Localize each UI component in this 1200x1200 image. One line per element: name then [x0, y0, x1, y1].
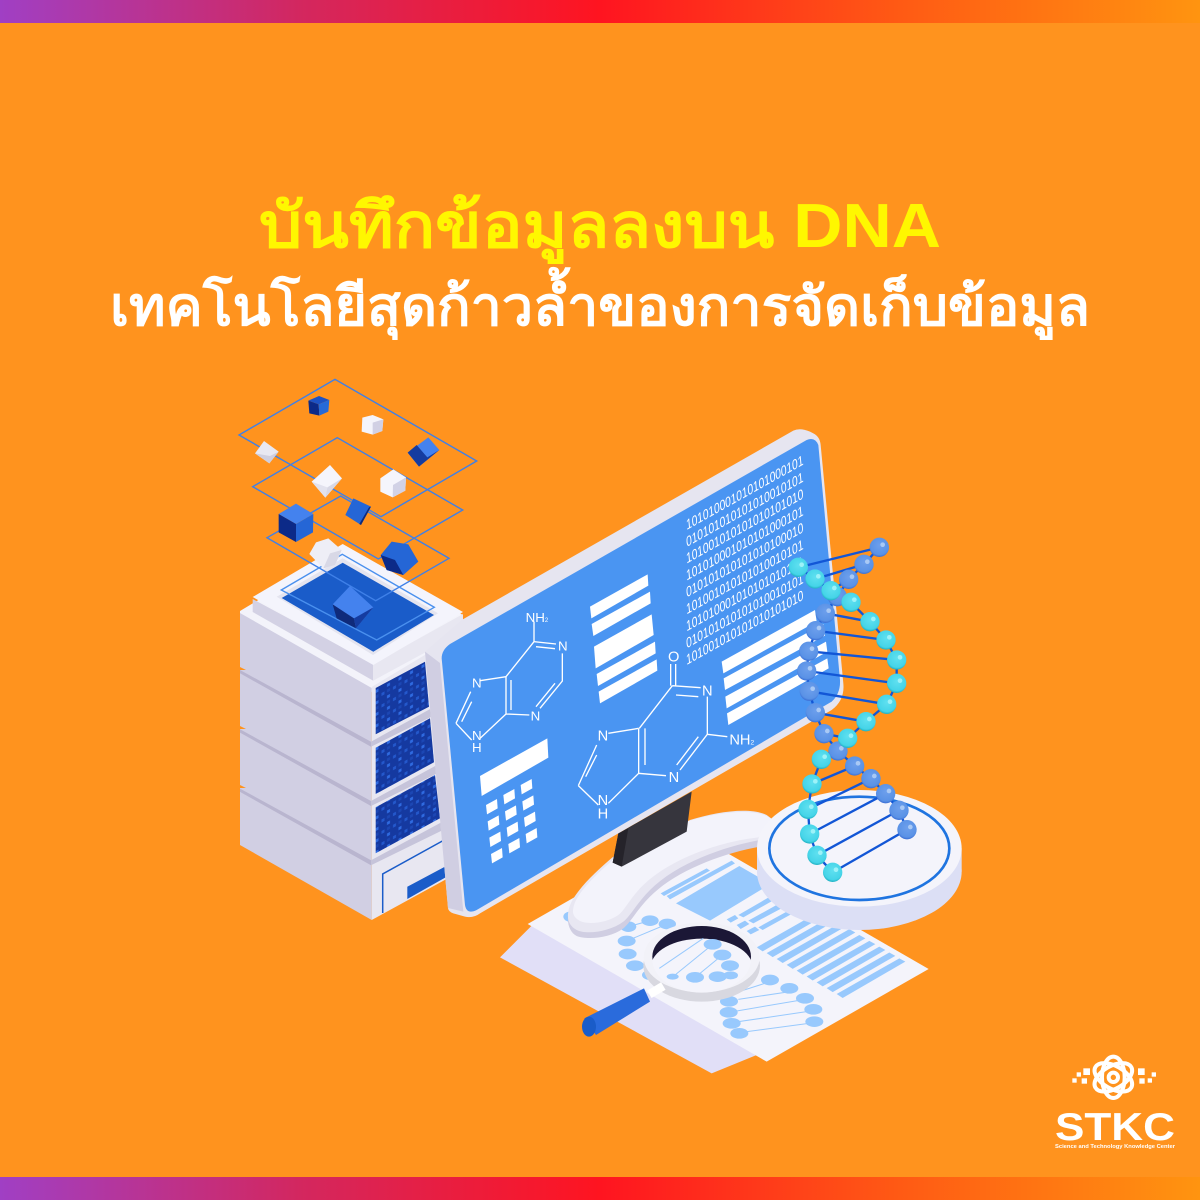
helix rungs	[798, 547, 907, 872]
molecule two: N	[598, 793, 608, 809]
logo pixel squares	[1072, 1068, 1156, 1084]
monitor stand	[613, 792, 692, 867]
molecule two: N	[669, 770, 679, 786]
logo tagline: Science and Technology Knowledge Center	[1055, 1144, 1175, 1150]
molecule two	[578, 649, 755, 823]
binary code: 101001010101010101010	[685, 485, 804, 567]
server drive panels	[376, 662, 440, 853]
teal sphere highlights	[799, 562, 902, 872]
bottom gradient bar	[0, 1177, 1200, 1200]
molecule one	[456, 610, 568, 755]
monitor	[425, 429, 844, 917]
blue sphere highlights	[808, 542, 913, 829]
server base slot	[383, 839, 447, 913]
molecule two: O	[668, 649, 679, 665]
binary code: 101001010101010101010	[685, 586, 804, 668]
molecule two: NH2	[729, 733, 755, 749]
logo wordmark: STKC	[1055, 1105, 1175, 1149]
logo atom	[1090, 1057, 1137, 1098]
monitor base arm	[568, 811, 773, 938]
sheet content blocks	[661, 861, 905, 998]
calculator widget	[480, 738, 548, 863]
DNA stand disc	[757, 790, 962, 930]
binary code: 010101010101010010101	[685, 570, 804, 652]
title line 1: บันทึกข้อมูลลงบน DNA	[259, 192, 941, 264]
text bars right	[722, 610, 829, 725]
data planes	[239, 379, 477, 640]
DNA double helix	[789, 538, 917, 882]
binary code: 010101010101010010101	[685, 468, 804, 550]
monitor screen	[442, 439, 840, 912]
text bars centre	[590, 574, 657, 703]
molecule two: N	[702, 683, 713, 699]
sheet molecule diagrams	[563, 912, 823, 1039]
documents	[500, 811, 929, 1073]
magnifying glass	[582, 922, 760, 1037]
molecule one: NH2	[526, 610, 549, 625]
STKC logo	[1055, 1057, 1175, 1150]
binary code: 101010001010101010101	[685, 553, 804, 635]
magnifier rim	[643, 930, 760, 1002]
magnifier handle	[582, 986, 663, 1037]
back sheet	[500, 924, 757, 1073]
molecule one: N	[558, 639, 568, 654]
molecule one: H	[472, 740, 482, 755]
molecule two: H	[598, 807, 608, 823]
binary code: 101010001010101000101	[685, 502, 804, 584]
molecule one: N	[472, 728, 482, 743]
binary code: 010101010101010100010	[685, 519, 804, 601]
binary code: 101010001010101000101	[685, 451, 804, 533]
teal spheres	[789, 558, 906, 882]
title line 2: เทคโนโลยีสุดก้าวล้ำของการจัดเก็บข้อมูล	[110, 267, 1090, 341]
front sheet	[528, 831, 929, 1062]
server tower	[240, 544, 463, 920]
molecule one: N	[531, 709, 540, 724]
molecule two: N	[598, 729, 608, 745]
molecule one: N	[472, 675, 482, 690]
monitor bezel	[425, 429, 844, 917]
binary code	[685, 451, 804, 668]
magnifier lens	[651, 926, 752, 995]
top gradient bar	[0, 0, 1200, 23]
binary code: 101001010101010010101	[685, 536, 804, 618]
data cubes	[255, 396, 439, 628]
blue spheres	[797, 538, 917, 839]
server lid	[253, 544, 463, 681]
title	[110, 192, 1090, 341]
